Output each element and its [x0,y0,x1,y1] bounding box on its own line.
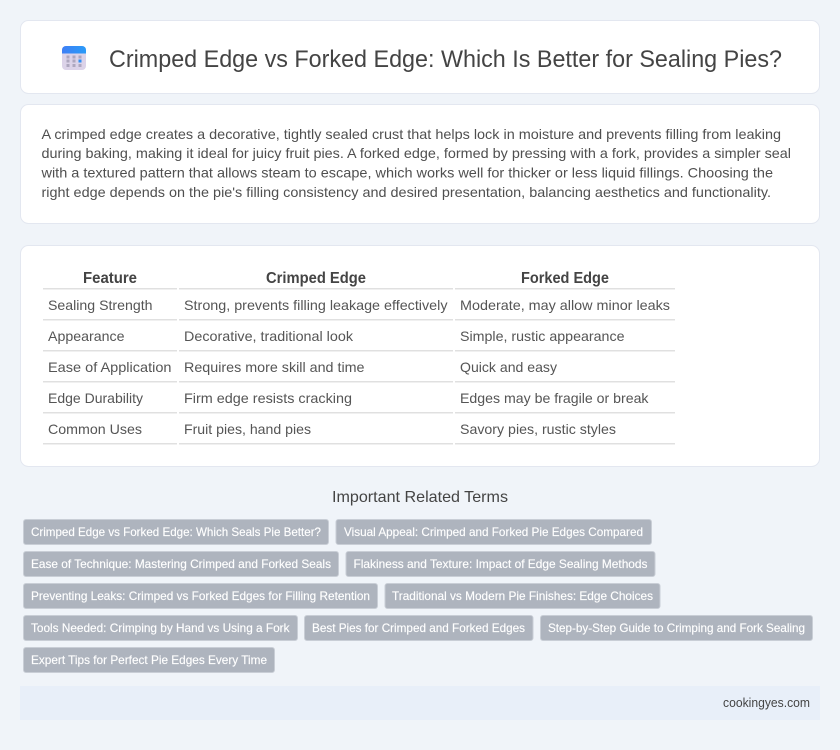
panel: related term chips [24,520,812,672]
text block: summary: during baking, making it ideal for juicy fruit pies. A forked edge, formed by pressing with a fork, provides a simpler seal [42,145,791,161]
chip [24,584,378,608]
chip: Flakiness and Texture: Impact of Edge Sealing Methods [354,557,648,571]
chip [24,648,274,672]
table row: edge durability: Edges may be fragile or break [460,390,650,406]
chip: Tools Needed: Crimping by Hand vs Using a Fork [31,621,290,635]
table row: sealing strength: Strong, prevents filling leakage effectively [184,297,448,313]
text block: summary: right edge depends on the pie's filling consistency and desired presentation, balancing aesthetics and functionality. [42,184,771,200]
chip: Preventing Leaks: Crimped vs Forked Edges for Filling Retention [31,589,370,603]
panel: title header [20,20,820,94]
table header [83,270,609,287]
panel: comparison table [20,246,820,466]
chip [24,616,298,640]
table row: edge durability [48,390,650,406]
chip: Visual Appeal: Crimped and Forked Pie Edges Compared [344,525,643,539]
chip: Step-by-Step Guide to Crimping and Fork Sealing [548,621,805,635]
table header: Crimped Edge [266,270,366,287]
heading: important related terms: Important Related Terms [332,489,508,506]
text block: summary [40,126,791,200]
table row: appearance [48,328,625,344]
footer source text: cookingyes.com [723,696,810,710]
chip [304,616,533,640]
table row: appearance: Appearance [48,328,125,344]
chip [24,520,328,544]
table row: edge durability: Edge Durability [48,390,143,406]
table row: appearance: Decorative, traditional look [184,328,354,344]
chip [346,552,655,576]
chip [385,584,660,608]
table row: ease of application: Quick and easy [460,359,557,375]
table row: sealing strength [48,297,670,313]
text block: summary: with a textured pattern that allows steam to escape, which works well for thicker or less liquid fillings. Choosing the [40,164,773,180]
table row: common uses [48,421,616,437]
table row: sealing strength: Sealing Strength [48,297,152,313]
table row: common uses: Savory pies, rustic styles [460,421,616,437]
table header: Feature [83,270,137,287]
table row: common uses: Fruit pies, hand pies [184,421,311,437]
table row: common uses: Common Uses [48,421,142,437]
text block: summary: A crimped edge creates a decorative, tightly sealed crust that helps lock in moisture and prevents filling from leaking [42,126,781,142]
chip: Ease of Technique: Mastering Crimped and Forked Seals [31,557,331,571]
table header: Forked Edge [521,270,609,287]
icon: calendar [62,46,86,70]
table row: sealing strength: Moderate, may allow minor leaks [460,297,670,313]
chip: Best Pies for Crimped and Forked Edges [312,621,525,635]
chip [540,616,812,640]
chip: Expert Tips for Perfect Pie Edges Every Time [31,653,267,667]
table row: ease of application: Requires more skill and time [184,359,365,375]
chip [24,552,338,576]
table row: ease of application: Ease of Application [48,359,172,375]
footer [20,686,820,720]
table row: ease of application [48,359,557,375]
panel: summary paragraph [20,104,820,224]
table row: edge durability: Firm edge resists cracking [184,390,352,406]
chip: Crimped Edge vs Forked Edge: Which Seals Pie Better? [31,525,321,539]
chip: Traditional vs Modern Pie Finishes: Edge Choices [392,589,653,603]
title: Crimped Edge vs Forked Edge: Which Is Better for Sealing Pies? [109,46,782,73]
table row: appearance: Simple, rustic appearance [460,328,625,344]
chip [336,520,652,544]
